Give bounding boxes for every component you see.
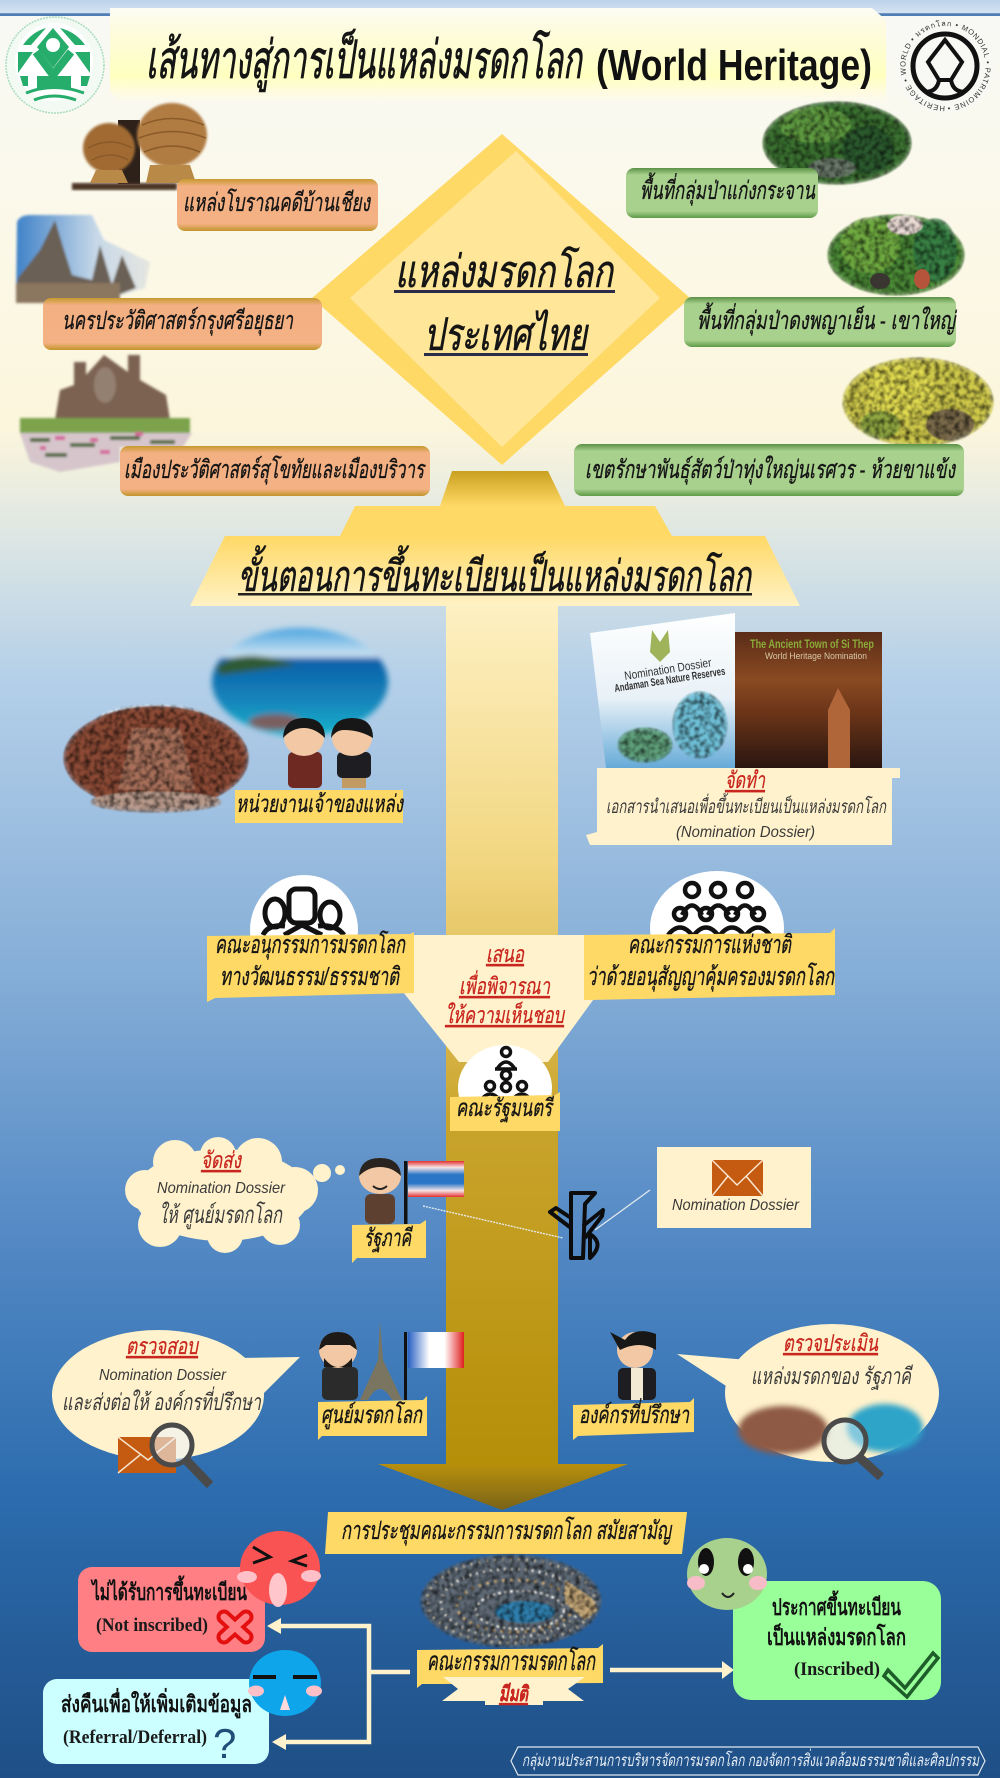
photo: Thung Yai forest — [842, 357, 994, 447]
ribbon: resolved: มีมติ — [499, 1682, 529, 1706]
label: cabinet — [450, 1092, 560, 1131]
icon: two officers — [283, 718, 373, 788]
panel: inscribed — [733, 1581, 941, 1700]
panel: prepare dossier: จัดทำ — [725, 767, 766, 793]
label: subcommittee — [207, 930, 414, 1002]
panel: nomination dossier envelope: Nomination Dossier — [672, 1197, 800, 1214]
top band — [0, 0, 1000, 16]
photo: Kaeng Krachan forest — [762, 101, 912, 185]
callout: evaluate site — [677, 1324, 939, 1477]
icon: Eiffel tower — [360, 1321, 402, 1400]
panel: inscribed: ประกาศขึ้นทะเบียน — [772, 1590, 901, 1620]
label: site owner — [235, 790, 405, 823]
panel: not inscribed: ไม่ได้รับการขึ้นทะเบียน — [90, 1575, 247, 1605]
arrow: process shaft — [378, 606, 628, 1510]
icon: angry face — [237, 1531, 321, 1607]
label: Ayutthaya: นครประวัติศาสตร์กรุงศรีอยุธยา — [62, 307, 294, 336]
label: subcommittee: คณะอนุกรรมการมรดกโลก — [215, 930, 406, 960]
panel: funnel proposal — [403, 935, 596, 1062]
photo: committee meeting — [420, 1554, 602, 1648]
callout: send dossier cloud: Nomination Dossier — [157, 1180, 286, 1197]
label: subcommittee: ทางวัฒนธรรม/ธรรมชาติ — [220, 963, 400, 991]
label: Ayutthaya — [43, 298, 322, 350]
callout: evaluate site: ตรวจประเมิน — [783, 1330, 879, 1356]
callout: check dossier: และส่งต่อให้ องค์กรที่ปรึกษา — [62, 1386, 262, 1415]
logo: World Heritage emblem: HERITAGE • WORLD • มรดกโลก • MONDIAL • PATRIMOINE • — [900, 20, 991, 112]
label: committee session: การประชุมคณะกรรมการมรดกโลก สมัยสามัญ — [341, 1516, 673, 1546]
label: committee session — [325, 1512, 687, 1554]
label: World Heritage Committee — [417, 1644, 603, 1688]
icon: red cross — [224, 1617, 246, 1637]
icon: elephants — [870, 269, 930, 289]
label: advisory body — [573, 1398, 694, 1440]
callout: check dossier: ตรวจสอบ — [126, 1333, 200, 1359]
icon: Thai official — [359, 1158, 401, 1224]
panel: referral deferral: ส่งคืนเพื่อให้เพิ่มเติมข้อมูล — [61, 1687, 252, 1719]
label: Sukhothai: เมืองประวัติศาสตร์สุโขทัยและเมืองบริวาร — [124, 455, 426, 485]
title banner: (World Heritage) — [596, 41, 872, 90]
label: World Heritage Committee: คณะกรรมการมรดกโลก — [427, 1646, 596, 1676]
label: Kaeng Krachan — [626, 168, 818, 218]
icon: national committee group — [650, 871, 784, 985]
label: national committee: ว่าด้วยอนุสัญญาคุ้มครองมรดกโลก — [587, 962, 835, 992]
callout: send dossier cloud: ให้ ศูนย์มรดกโลก — [159, 1201, 283, 1230]
icon: airplane with connector lines — [423, 1190, 650, 1258]
arrows: decision routes — [267, 1618, 734, 1750]
label: Ban Chiang — [177, 179, 378, 231]
photo: dossier Andaman: Andaman Sea Nature Reserves — [614, 666, 726, 695]
panel: referral deferral: (Referral/Deferral) — [63, 1727, 207, 1748]
icon: French flag — [404, 1332, 464, 1400]
panel: inscribed: (Inscribed) — [794, 1659, 880, 1680]
icon: happy green face — [687, 1538, 767, 1610]
label: national committee: คณะกรรมการแห่งชาติ — [628, 931, 792, 959]
label: Kaeng Krachan: พื้นที่กลุ่มป่าแก่งกระจาน — [640, 172, 816, 206]
panel: not inscribed — [78, 1567, 265, 1652]
photo: dossier Si Thep: The Ancient Town of Si Thep — [750, 637, 874, 651]
panel: funnel proposal: ให้ความเห็นชอบ — [445, 1001, 566, 1028]
label: World Heritage Centre: ศูนย์มรดกโลก — [321, 1401, 423, 1430]
icon: question mark: ? — [213, 1720, 236, 1767]
label: Sukhothai — [120, 446, 430, 496]
label: cabinet: คณะรัฐมนตรี — [456, 1095, 554, 1123]
panel: World Heritage diamond — [312, 134, 690, 465]
label: advisory body: องค์กรที่ปรึกษา — [579, 1398, 690, 1429]
panel: prepare dossier — [586, 767, 900, 845]
label: World Heritage Centre — [318, 1396, 427, 1440]
panel: World Heritage diamond: ประเทศไทย — [424, 309, 589, 360]
icon: advisory body officer — [610, 1331, 656, 1400]
label: Dong Phayayen — [684, 297, 957, 347]
photo: Sukhothai temple and lotus pond — [20, 355, 192, 472]
panel: funnel proposal: เพื่อพิจารณา — [459, 970, 551, 999]
photo: dossier Si Thep: World Heritage Nomination — [765, 651, 867, 661]
callout: evaluate site: แหล่งมรดกของ รัฐภาคี — [751, 1363, 913, 1390]
heading: registration steps — [190, 471, 800, 606]
label: site owner: หน่วยงานเจ้าของแหล่ง — [236, 791, 405, 818]
photo: ancient pots — [72, 103, 207, 190]
panel: prepare dossier: (Nomination Dossier) — [676, 824, 815, 841]
ribbon: resolved — [442, 1677, 585, 1706]
callout: check dossier — [52, 1330, 300, 1485]
panel: funnel proposal: เสนอ — [486, 941, 525, 967]
label: national committee — [584, 928, 835, 1000]
logo: department emblem — [6, 17, 104, 113]
panel: inscribed: เป็นแหล่งมรดกโลก — [767, 1622, 906, 1650]
callout: send dossier cloud: จัดส่ง — [201, 1147, 242, 1173]
label: Ban Chiang: แหล่งโบราณคดีบ้านเชียง — [183, 188, 371, 217]
photo: dossier Si Thep — [735, 632, 882, 768]
icon: sad blue face — [248, 1650, 322, 1716]
photo: red stone temple — [63, 704, 249, 813]
panel: not inscribed: (Not inscribed) — [96, 1615, 208, 1636]
panel: referral deferral — [43, 1679, 269, 1767]
title banner — [110, 8, 886, 103]
icon: check mark — [884, 1653, 938, 1697]
icon: cabinet group — [458, 1045, 552, 1131]
panel: nomination dossier envelope — [657, 1147, 811, 1228]
photo: Dong Phayayen forest — [827, 214, 965, 296]
icon: subcommittee group — [250, 875, 358, 985]
photo: dossier Andaman: Nomination Dossier — [623, 655, 712, 683]
callout: check dossier: Nomination Dossier — [99, 1367, 227, 1384]
title banner: เส้นทางสู่การเป็นแหล่งมรดกโลก — [146, 28, 584, 92]
label: state party — [352, 1220, 426, 1263]
photo: sea — [212, 628, 388, 736]
icon: Thai flag — [404, 1161, 464, 1224]
footer credit — [511, 1747, 985, 1775]
label: state party: รัฐภาคี — [364, 1225, 413, 1253]
panel: World Heritage diamond: แหล่งมรดกโลก — [395, 246, 615, 297]
icon: World Heritage Centre officer — [319, 1332, 358, 1400]
label: Thung Yai — [574, 444, 964, 496]
photo: Ayutthaya temple — [16, 215, 150, 303]
callout: send dossier cloud — [125, 1137, 345, 1253]
photo: dossier Andaman — [590, 613, 735, 768]
heading: registration steps: ขั้นตอนการขึ้นทะเบียนเป็นแหล่งมรดกโลก — [238, 545, 752, 601]
